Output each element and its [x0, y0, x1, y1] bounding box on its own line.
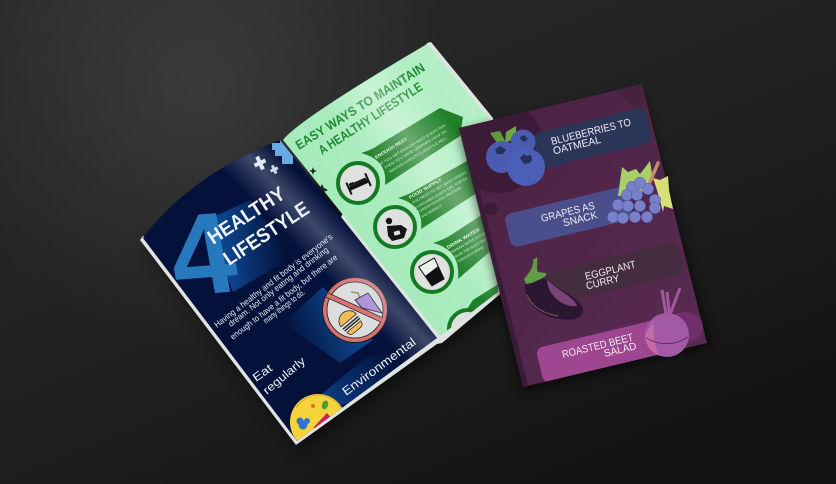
pill: eggplant: EGGPLANT — [584, 259, 638, 283]
pill: beet — [537, 321, 658, 382]
icon: blueberries — [486, 126, 545, 186]
sparkles — [309, 167, 328, 192]
page gloss — [339, 66, 498, 300]
ribbon: food supply: YOU NEED TO GET WHAT FOODS — [412, 170, 468, 205]
ribbon: food supply: FOOD SUPPLY — [408, 177, 443, 200]
magazine shadow — [145, 120, 510, 450]
ribbon: enough rest — [361, 108, 463, 185]
ribbon: drink water: THROUGH URINE — [456, 245, 485, 264]
gloss along spine — [225, 146, 436, 358]
label: eat regularly: regularly — [261, 355, 308, 397]
blue background block behind number — [216, 200, 282, 292]
icon: bed — [338, 163, 378, 203]
ribbon: enough rest: ENOUGH REST — [374, 136, 408, 160]
heading: HEALTHY — [204, 182, 290, 249]
pill: blueberries: BLUEBERRIES TO — [550, 116, 632, 148]
ribbon: food supply — [398, 161, 476, 229]
ribbon: drink water: DRINKING WATER IS ESSENTIAL — [450, 226, 495, 255]
label: eat regularly: Eat — [251, 362, 276, 384]
icon: person with bag — [375, 207, 415, 247]
intro paragraph: Having a healthy and fit body is everyone's — [212, 232, 334, 330]
heading — [206, 186, 310, 266]
icon: fourth circle — [447, 308, 476, 331]
icon: eggplant — [524, 257, 583, 320]
pill: blueberries: OATMEAL — [552, 134, 602, 157]
ribbon: drink water: DRINK WATER — [446, 227, 481, 250]
icon: glass of water — [412, 252, 452, 292]
ribbon: enough rest: IF YOU GET ENOUGH REST EVERY DAY — [379, 123, 447, 166]
page title: EASY WAYS TO MAINTAIN — [293, 60, 428, 153]
panel: right magazine page — [283, 44, 498, 336]
intro paragraph: enough to have a fit body, but there are — [228, 252, 340, 342]
ribbon: fourth item — [458, 284, 498, 322]
pill: beet: ROASTED BEET — [561, 331, 635, 361]
intro paragraph: dream. Not only eating and drinking — [226, 245, 330, 329]
ribbon: drink water — [433, 216, 490, 279]
big number 4: 4 — [159, 187, 246, 321]
pill: blueberries — [532, 107, 653, 169]
ribbon: drink water: FROM THE BODY WASTE — [452, 234, 493, 260]
page title: A HEALTHY LIFESTYLE — [315, 79, 425, 158]
dark corner circle — [459, 112, 541, 193]
spine dot — [484, 202, 498, 216]
pill: beet: SALAD — [603, 340, 638, 360]
icon: no fast food — [322, 277, 388, 343]
decorative plus signs — [254, 140, 293, 174]
label: environmental: Environmental — [339, 335, 419, 398]
heading: LIFESTYLE — [220, 198, 313, 270]
intro paragraph: many things to do. — [261, 287, 307, 326]
panel: left magazine page — [143, 138, 437, 450]
top right shape — [620, 84, 646, 108]
pill: grapes: SNACK — [562, 209, 599, 229]
icon: beet — [645, 288, 703, 357]
ribbon: food supply: AND MINERALS. — [420, 203, 443, 219]
purple booklet shadow — [459, 90, 711, 392]
spine strip — [459, 127, 528, 387]
icon: pizza — [290, 394, 342, 441]
ribbon: food supply: CONSUMED EVERY DAY, FOR EX — [414, 176, 469, 210]
pill: eggplant: CURRY — [585, 273, 621, 292]
pill: eggplant — [546, 242, 684, 300]
pill: grapes: GRAPES AS — [540, 200, 596, 225]
pill: grapes — [504, 186, 632, 248]
ribbon: food supply: CARBOHYDRATES, PROTEINS, — [418, 185, 463, 214]
icon: grapes — [607, 161, 673, 224]
blue background block behind icon — [283, 287, 373, 363]
magazine page edges — [140, 42, 505, 445]
lower blue band — [322, 354, 390, 405]
ribbon: enough rest: MAINTAIN A HEALTHY LIFESTYLE WELL — [388, 136, 448, 174]
ribbon: enough rest: THEN YOU HAVE LEARNED HOW TO — [383, 129, 447, 170]
panel: purple booklet — [452, 80, 707, 387]
